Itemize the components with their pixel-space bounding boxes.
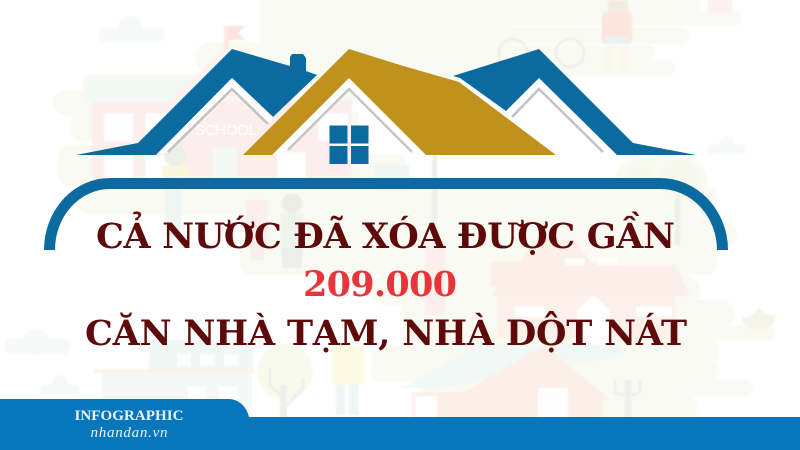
school sign: SCHOOL bbox=[195, 122, 257, 139]
house roofs logo bbox=[76, 49, 696, 164]
headline line 3: CĂN NHÀ TẠM, NHÀ DỘT NÁT bbox=[85, 309, 687, 354]
houses bbox=[402, 240, 776, 418]
footer site: nhandan.vn bbox=[90, 425, 168, 441]
footer band bbox=[0, 399, 800, 450]
centre house wall bbox=[349, 78, 426, 155]
people bbox=[162, 127, 445, 415]
right house white wall bbox=[506, 78, 617, 155]
right house roof bbox=[453, 49, 696, 155]
woman and bicycle bbox=[499, 0, 732, 73]
right house roof shadow bbox=[512, 89, 603, 152]
school building bbox=[85, 26, 352, 180]
window bbox=[330, 126, 368, 164]
footer label bbox=[74, 408, 184, 441]
curved frame bbox=[50, 184, 722, 250]
clouds bbox=[5, 16, 747, 394]
highlighted number: 209.000 bbox=[303, 264, 457, 305]
headline line 1: CẢ NƯỚC ĐÃ XÓA ĐƯỢC GẦN bbox=[96, 210, 675, 257]
left house white trim bbox=[156, 78, 273, 155]
left house roof shadow bbox=[168, 89, 268, 152]
footer title: INFOGRAPHIC bbox=[74, 408, 184, 424]
headline bbox=[85, 210, 687, 354]
centre house roof shadow bbox=[288, 89, 412, 152]
centre house roof bbox=[243, 49, 556, 155]
left house roof bbox=[76, 49, 317, 155]
apartment and trees bbox=[94, 155, 700, 418]
centre house white trim bbox=[272, 78, 360, 155]
